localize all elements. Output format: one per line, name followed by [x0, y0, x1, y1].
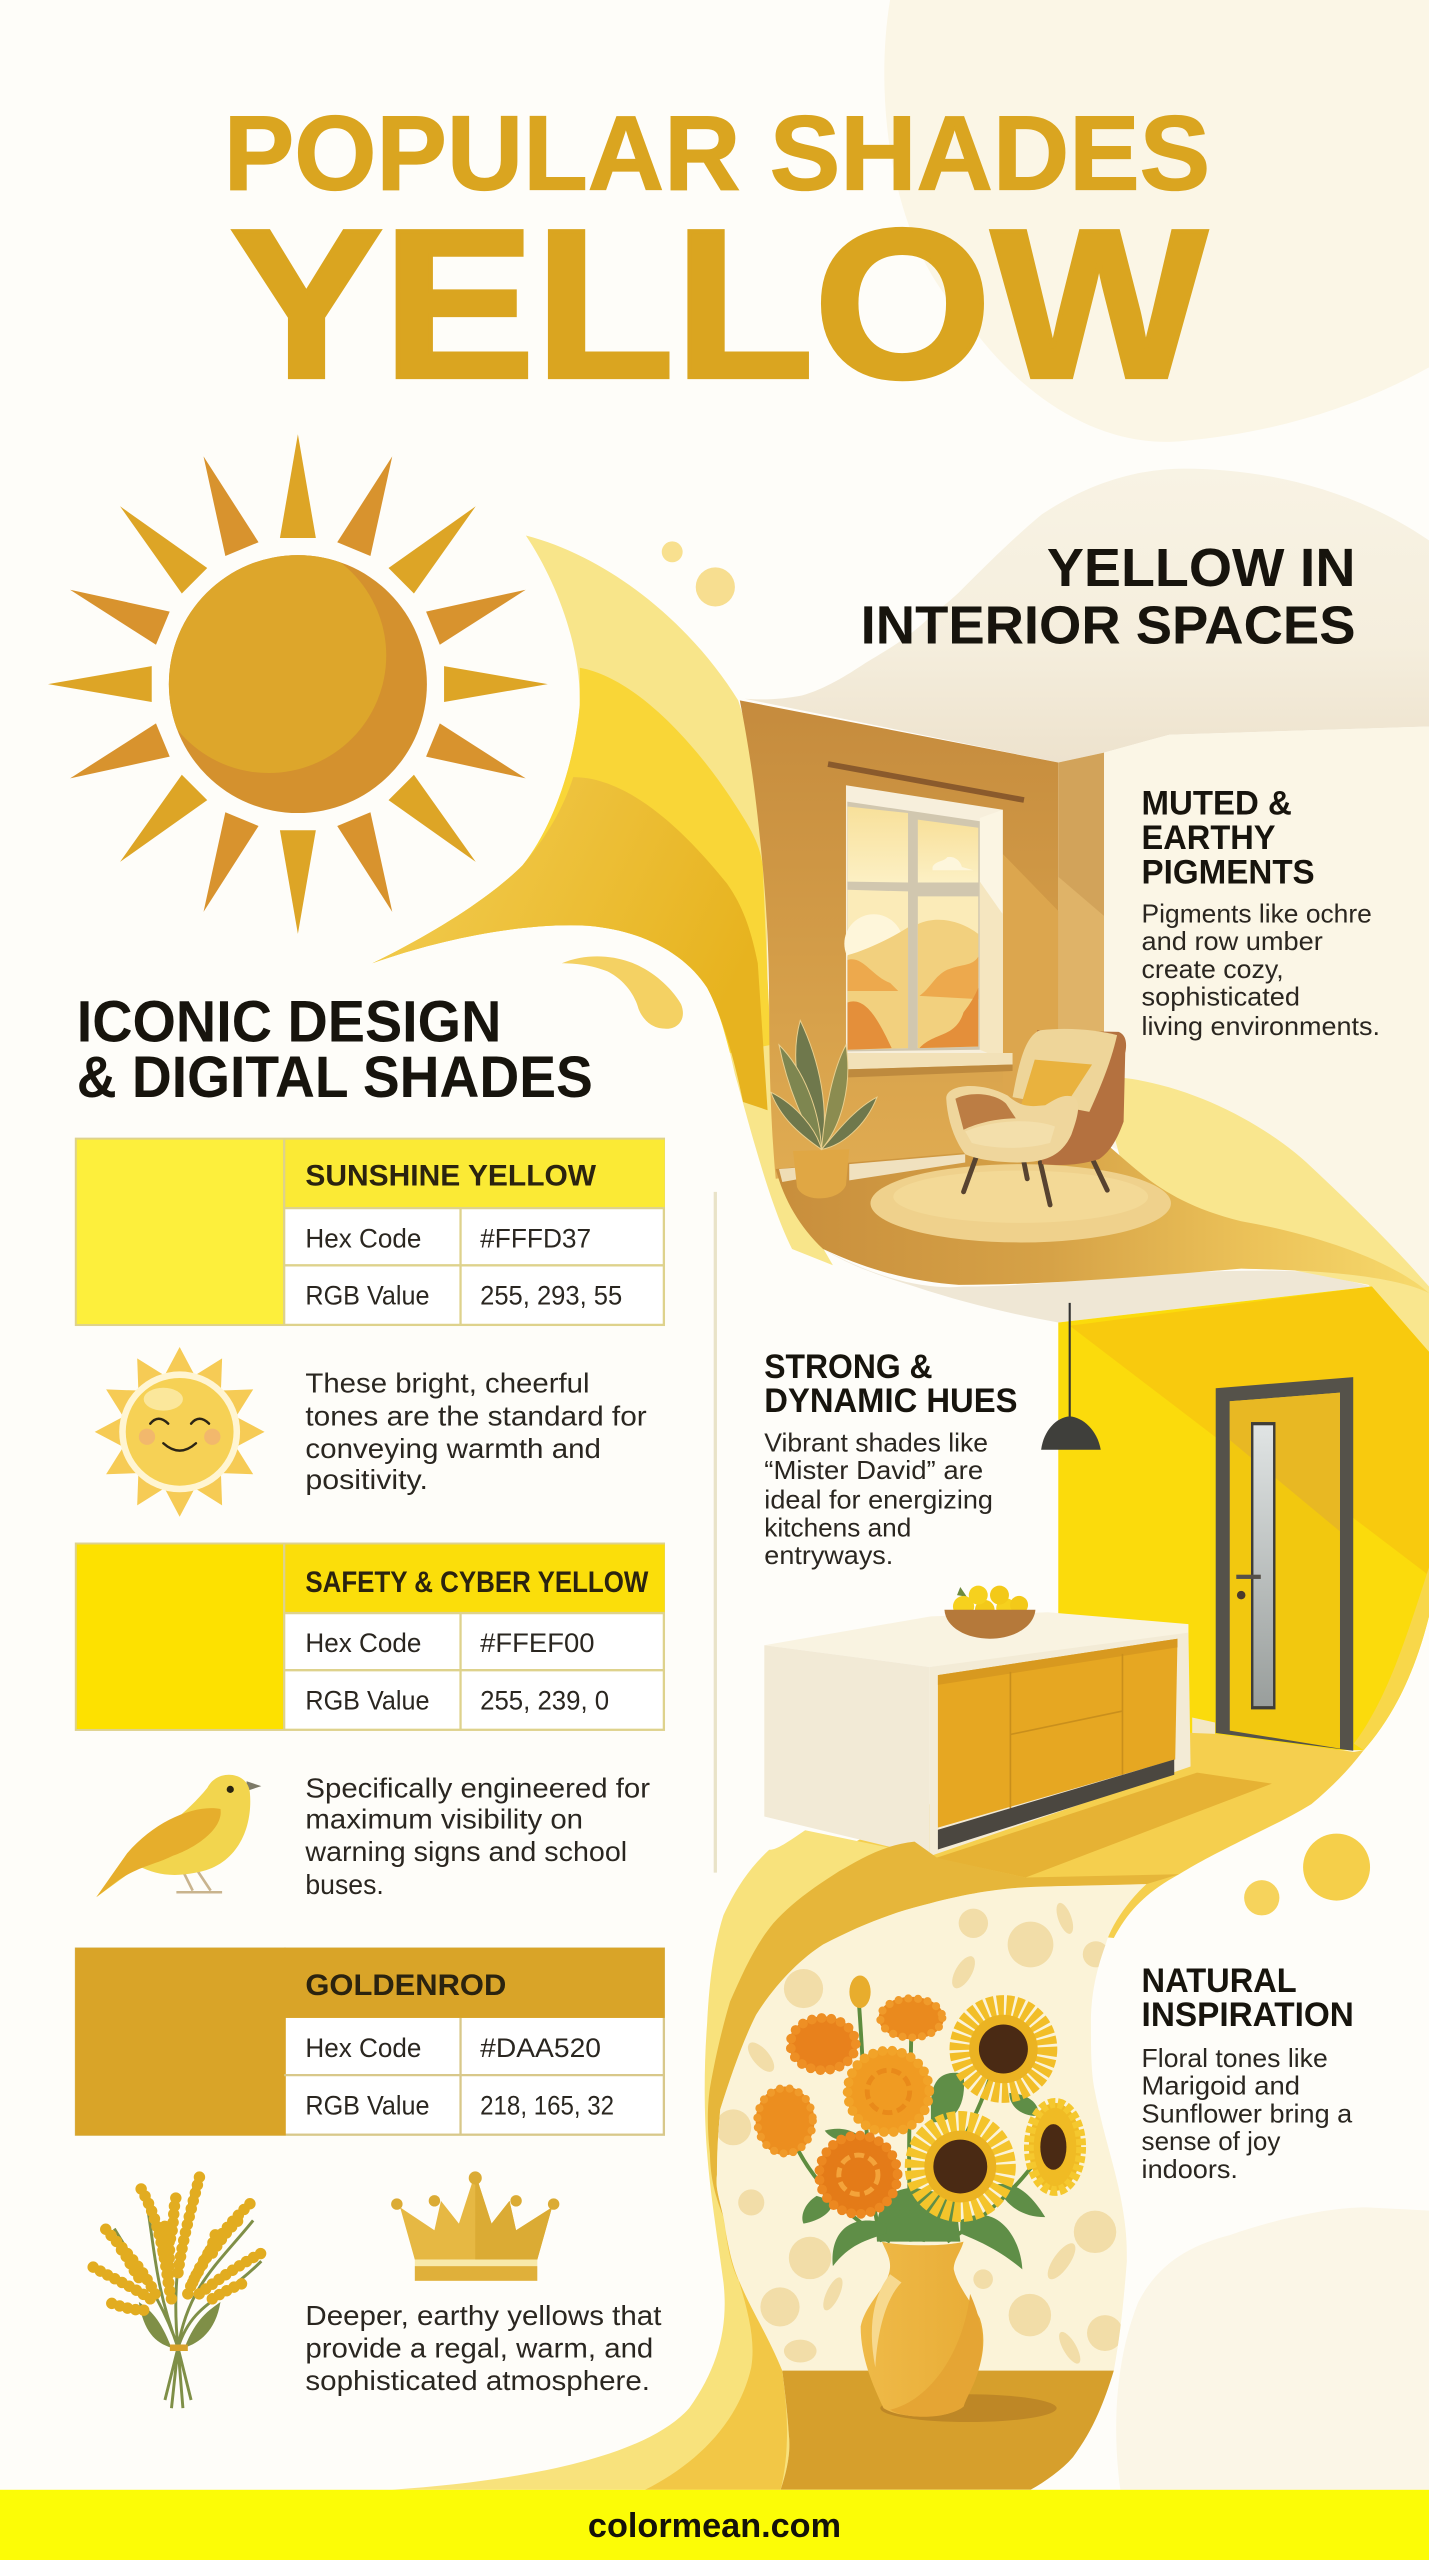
heading: interior spaces	[861, 538, 1356, 655]
text block: bright cheerful tones: These bright, cheerful	[305, 1368, 590, 1399]
text block: muted and earthy: EARTHY	[1142, 819, 1276, 857]
text block: strong and dynamic	[764, 1348, 1017, 1570]
icon: yellow bird	[96, 1775, 261, 1897]
table: goldenrod: Hex Code	[305, 2033, 421, 2063]
wave ribbon lower	[392, 1830, 1179, 2490]
text block: strong and dynamic: ideal for energizing	[764, 1485, 993, 1515]
rear wall	[740, 700, 1058, 1179]
text block: bright cheerful tones: tones are the standard for	[305, 1400, 647, 1431]
table: safety and cyber yellow	[76, 1544, 665, 1730]
text block: deeper earthy yellows: provide a regal, warm, and	[305, 2333, 653, 2364]
cream blob and ceiling	[745, 469, 1429, 762]
droplet	[562, 956, 683, 1029]
table: safety and cyber yellow: Hex Code	[305, 1628, 421, 1658]
illustration: living room	[740, 700, 1429, 1293]
side wall	[1058, 753, 1104, 1143]
text block: bright cheerful tones	[305, 1368, 647, 1495]
text block: strong and dynamic: DYNAMIC HUES	[764, 1382, 1017, 1420]
table: sunshine yellow: #FFFD37	[480, 1223, 591, 1253]
marigolds	[756, 1976, 944, 2216]
table: sunshine yellow: 255, 293, 55	[480, 1280, 622, 1310]
text block: engineered for visibility: Specifically engineered for	[305, 1773, 650, 1804]
vertical divider line	[714, 1192, 716, 1873]
footer bar	[0, 2490, 1429, 2560]
text block: natural inspiration: indoors.	[1142, 2154, 1238, 2184]
rug	[870, 1164, 1171, 1242]
text block: engineered for visibility: maximum visibility on	[305, 1804, 583, 1835]
text block: strong and dynamic: Vibrant shades like	[764, 1427, 988, 1457]
floor	[849, 1727, 1364, 1938]
title line 2: YELLOW	[230, 185, 1208, 422]
decorative circle lower right large	[1303, 1834, 1370, 1901]
table: safety and cyber yellow: 255, 239, 0	[480, 1685, 609, 1715]
fruit bowl	[944, 1586, 1035, 1639]
text block: natural inspiration	[1142, 1962, 1354, 2184]
icon: smiling sun	[95, 1347, 265, 1517]
light shaft on wall	[1003, 854, 1078, 1143]
rug inner	[893, 1171, 1148, 1223]
icon: crown	[391, 2171, 559, 2281]
bouquet stems and leaves	[787, 2005, 1045, 2269]
pendant lamp	[1041, 1303, 1101, 1450]
counter	[764, 1612, 1191, 1856]
window	[844, 785, 1003, 1060]
text block: bright cheerful tones: conveying warmth and	[305, 1433, 601, 1464]
lower right cream blob	[1116, 2207, 1429, 2490]
text block: natural inspiration: NATURAL	[1142, 1962, 1297, 2000]
footer bar: colormean.com	[588, 2507, 841, 2545]
text block: muted and earthy: MUTED &	[1142, 785, 1292, 823]
title	[224, 94, 1210, 422]
text block: natural inspiration: Marigoid and	[1142, 2071, 1300, 2101]
text block: muted and earthy	[1142, 785, 1380, 1041]
text block: engineered for visibility	[304, 1773, 650, 1900]
text block: muted and earthy: create cozy,	[1142, 954, 1284, 984]
window sill	[846, 1053, 1013, 1069]
sunflowers	[916, 2006, 1081, 2211]
text block: engineered for visibility: warning signs and school	[304, 1836, 627, 1867]
icon: large sun	[48, 434, 548, 934]
text block: natural inspiration: sense of joy	[1142, 2126, 1280, 2156]
floor shadow	[936, 1773, 1272, 1878]
yellow wall	[1058, 1287, 1429, 1750]
text block: muted and earthy: Pigments like ochre	[1142, 898, 1372, 928]
wall shade band	[1070, 1287, 1429, 1576]
title line 1: POPULAR SHADES	[224, 94, 1210, 212]
text block: natural inspiration: INSPIRATION	[1142, 1996, 1354, 2034]
wave right of room	[1097, 1076, 1429, 1355]
text block: strong and dynamic: STRONG &	[764, 1348, 933, 1386]
text block: strong and dynamic: entryways.	[764, 1540, 893, 1570]
table: goldenrod: RGB Value	[305, 2090, 430, 2120]
table: goldenrod: #DAA520	[480, 2033, 601, 2063]
table: goldenrod: GOLDENROD	[305, 1969, 506, 2002]
decorative circle large	[696, 567, 735, 607]
illustration: flower panel	[702, 1884, 1146, 2493]
text block: deeper earthy yellows	[305, 2300, 662, 2396]
heading: iconic shades: ICONIC DESIGN	[77, 990, 501, 1055]
side wall light	[1058, 877, 1104, 1110]
text block: natural inspiration: Floral tones like	[1142, 2043, 1328, 2073]
table: safety and cyber yellow: SAFETY & CYBER YELLOW	[305, 1566, 649, 1599]
text block: strong and dynamic: “Mister David” are	[764, 1455, 983, 1485]
heading: interior spaces: INTERIOR SPACES	[861, 595, 1356, 655]
table: goldenrod	[75, 1948, 665, 2136]
text block: muted and earthy: sophisticated	[1142, 982, 1300, 1012]
heading: iconic shades: & DIGITAL SHADES	[77, 1045, 593, 1110]
vase	[861, 2242, 983, 2417]
text block: natural inspiration: Sunflower bring a	[1142, 2098, 1353, 2128]
table: sunshine yellow	[76, 1139, 665, 1325]
plant	[771, 1020, 877, 1198]
text block: engineered for visibility: buses.	[305, 1869, 384, 1900]
baseboard left	[779, 1167, 800, 1182]
wall right edge wave	[1354, 1567, 1429, 1750]
text block: deeper earthy yellows: sophisticated atmosphere.	[305, 2365, 650, 2396]
heading: iconic shades	[77, 990, 593, 1110]
table: sunshine yellow: RGB Value	[305, 1280, 430, 1310]
table: safety and cyber yellow: #FFEF00	[480, 1628, 594, 1658]
cream wall panel	[1104, 727, 1429, 1306]
wave ribbon upper	[372, 536, 833, 1265]
text block: muted and earthy: and row umber	[1142, 926, 1323, 956]
decorative circle small	[662, 541, 683, 562]
table: sunshine yellow: SUNSHINE YELLOW	[305, 1159, 596, 1192]
door	[1216, 1377, 1353, 1751]
decorative circle lower right small	[1244, 1880, 1279, 1915]
sill shadow	[846, 1064, 1013, 1078]
text block: muted and earthy: PIGMENTS	[1142, 853, 1315, 891]
icon: goldenrod bouquet	[91, 2171, 268, 2408]
floor	[776, 1146, 1429, 1293]
table: sunshine yellow: Hex Code	[305, 1223, 421, 1253]
armchair	[946, 1029, 1126, 1205]
table: safety and cyber yellow: RGB Value	[305, 1685, 430, 1715]
cream blob top right	[884, 0, 1429, 442]
text block: bright cheerful tones: positivity.	[305, 1464, 428, 1495]
kitchen ceiling band	[823, 1249, 1372, 1322]
text block: deeper earthy yellows: Deeper, earthy yellows that	[305, 2300, 662, 2331]
curtain rod	[828, 764, 1024, 800]
text block: muted and earthy: living environments.	[1142, 1011, 1380, 1041]
wallpaper pattern and table	[702, 1901, 1143, 2493]
heading: interior spaces: YELLOW IN	[1047, 538, 1356, 598]
illustration: kitchen	[764, 1287, 1429, 1938]
text block: strong and dynamic: kitchens and	[764, 1512, 911, 1542]
table: goldenrod: 218, 165, 32	[480, 2090, 614, 2120]
baseboard	[1192, 1718, 1215, 1739]
baseboard	[849, 1154, 965, 1180]
